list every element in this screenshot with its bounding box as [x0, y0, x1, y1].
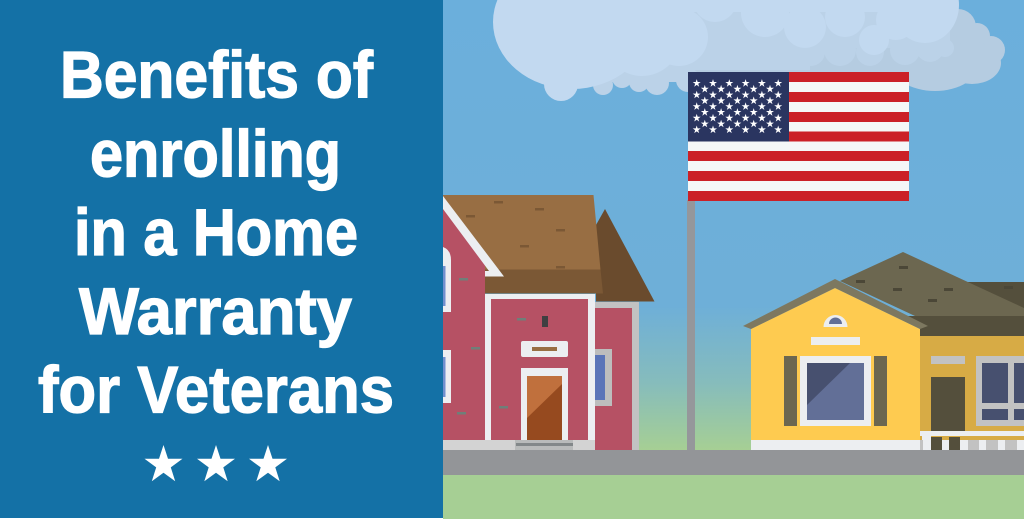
- title: in a Home: [74, 195, 358, 269]
- front gable wall: [751, 288, 920, 440]
- canton with stars: [688, 72, 789, 142]
- white foundation: [751, 440, 920, 450]
- main wall: [443, 205, 485, 440]
- side label: [931, 356, 965, 364]
- main window: [800, 356, 871, 426]
- side wing wall: [595, 302, 639, 450]
- side roof gable: [596, 209, 654, 302]
- side window: [595, 349, 612, 406]
- door: [521, 368, 568, 440]
- far back roof: [960, 282, 1024, 310]
- side door: [931, 377, 965, 432]
- shutters: [784, 356, 887, 426]
- three stars: [144, 445, 287, 481]
- door sign: [521, 341, 568, 357]
- title: Warranty: [79, 274, 352, 348]
- white plaque: [811, 337, 860, 345]
- roof shingle marks: [856, 266, 1013, 302]
- title: Benefits of: [60, 38, 374, 112]
- lower window: [443, 350, 451, 403]
- flag: [688, 72, 909, 201]
- gable roof trim: [743, 279, 928, 329]
- yellow house: [743, 252, 1024, 450]
- upper window: [443, 247, 451, 312]
- title: for Veterans: [38, 352, 394, 426]
- roof shingle marks: [466, 201, 565, 268]
- red stripes: [688, 72, 909, 201]
- side window: [976, 356, 1024, 426]
- blue title panel: [0, 0, 443, 518]
- lower roof band: [485, 270, 603, 294]
- gable trim: [443, 196, 504, 276]
- scene background: sky: [443, 0, 1024, 450]
- arched attic window: [824, 315, 848, 327]
- red house: [443, 195, 654, 450]
- main roof: [840, 252, 1024, 316]
- front bay: [485, 294, 595, 440]
- flagpole: [687, 200, 695, 450]
- vent: [542, 316, 548, 327]
- upper roof: [443, 195, 600, 270]
- foundation and steps: [443, 440, 595, 450]
- side wall: [920, 336, 1024, 431]
- porch railing: [920, 431, 1024, 450]
- title: enrolling: [90, 116, 341, 190]
- roof underside: [905, 316, 1024, 336]
- title: [38, 38, 394, 426]
- brick marks: [457, 278, 526, 414]
- road: [443, 450, 1024, 475]
- lawn: [443, 475, 1024, 519]
- cloud: [493, 0, 1005, 101]
